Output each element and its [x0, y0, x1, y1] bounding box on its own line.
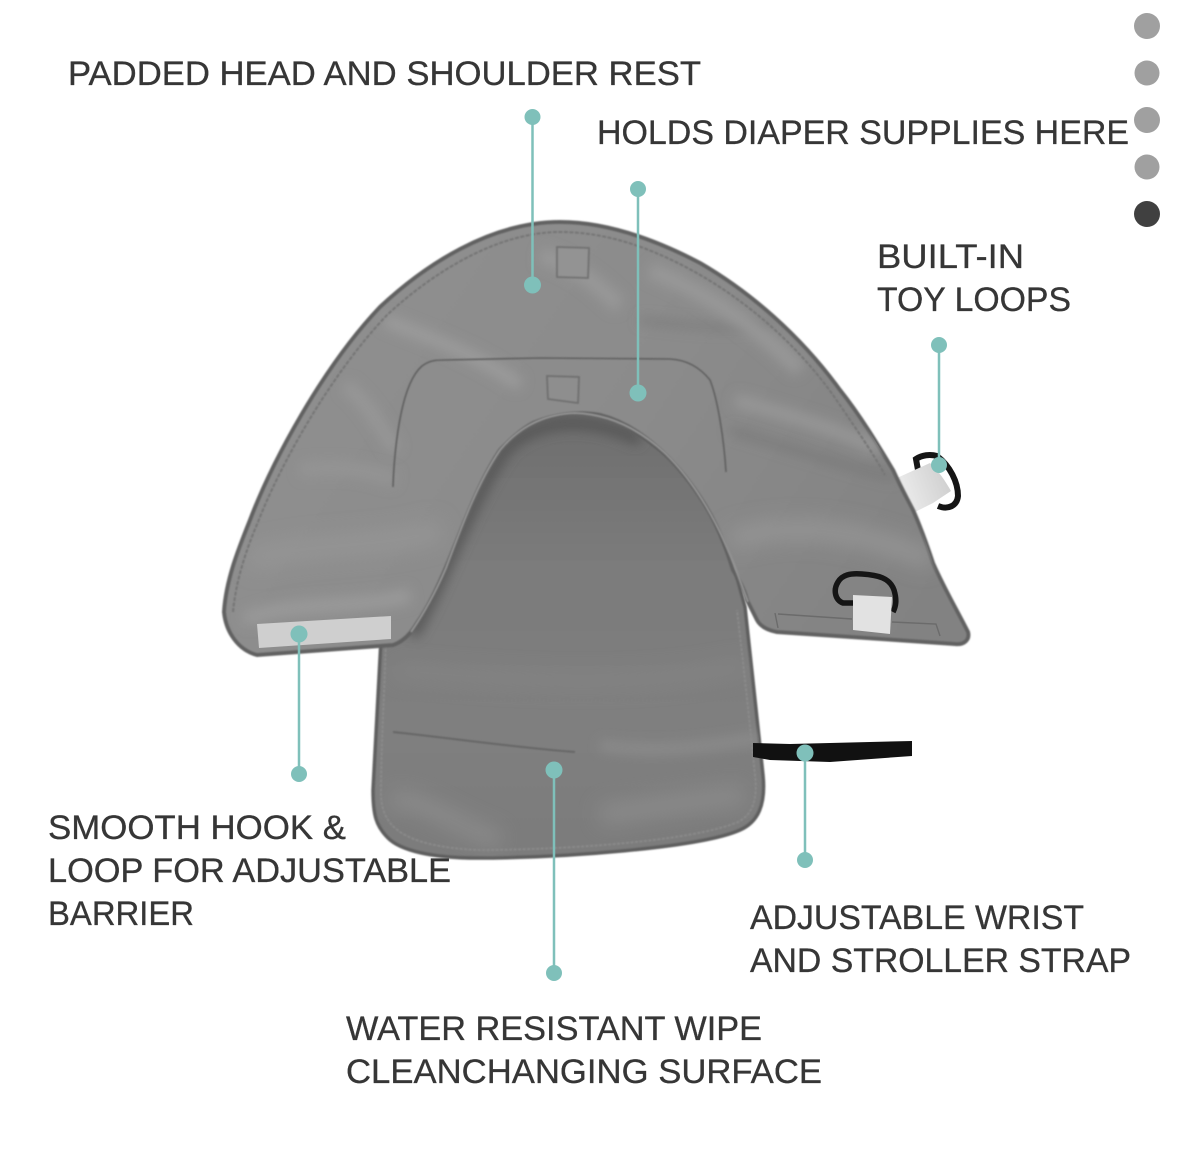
hook and loop strip [257, 616, 391, 648]
toy loop upper right [897, 455, 958, 512]
callout: toy loops [931, 337, 947, 473]
inner pocket stitch [393, 358, 726, 487]
label: holds diaper supplies here: HOLDS DIAPER SUPPLIES HERE [597, 114, 1129, 152]
label: padded head and shoulder rest: PADDED HEAD AND SHOULDER REST [68, 55, 701, 93]
callout: head rest [524, 109, 541, 294]
pocket fabric tab [547, 376, 579, 403]
changing pad illustration [224, 222, 968, 858]
callout lines and dots [290, 109, 947, 981]
d-ring lower right [835, 574, 896, 634]
inner binding highlight [411, 413, 748, 632]
pagination dots [1134, 13, 1160, 227]
label: smooth hook and loop [48, 809, 451, 933]
label: built-in toy loops [877, 238, 1071, 319]
arch shadow [412, 423, 640, 635]
callout: water resistant surface [546, 762, 562, 981]
label: smooth hook and loop: BARRIER [48, 895, 194, 933]
label: adjustable wrist and stroller strap: ADJUSTABLE WRIST [750, 899, 1084, 937]
callout: diaper supplies [630, 181, 646, 402]
label: water resistant surface: WATER RESISTANT WIPE [346, 1010, 762, 1048]
label: smooth hook and loop: SMOOTH HOOK & [48, 809, 346, 847]
label: water resistant surface: CLEANCHANGING SURFACE [346, 1053, 822, 1091]
label: water resistant surface [346, 1010, 822, 1091]
label: adjustable wrist and stroller strap [750, 899, 1131, 980]
top fabric tab [557, 247, 589, 278]
label: adjustable wrist and stroller strap: AND STROLLER STRAP [750, 942, 1131, 980]
label: built-in toy loops: TOY LOOPS [877, 281, 1071, 319]
label: smooth hook and loop: LOOP FOR ADJUSTABLE [48, 852, 451, 890]
label: built-in toy loops: BUILT-IN [877, 238, 1024, 276]
wrist strap [753, 741, 912, 762]
callout: wrist strap [796, 744, 814, 868]
upper head and shoulder rest [224, 222, 968, 655]
lower changing surface [373, 405, 764, 858]
hem stitch right wing [775, 613, 940, 636]
callout: hook and loop [290, 626, 308, 782]
